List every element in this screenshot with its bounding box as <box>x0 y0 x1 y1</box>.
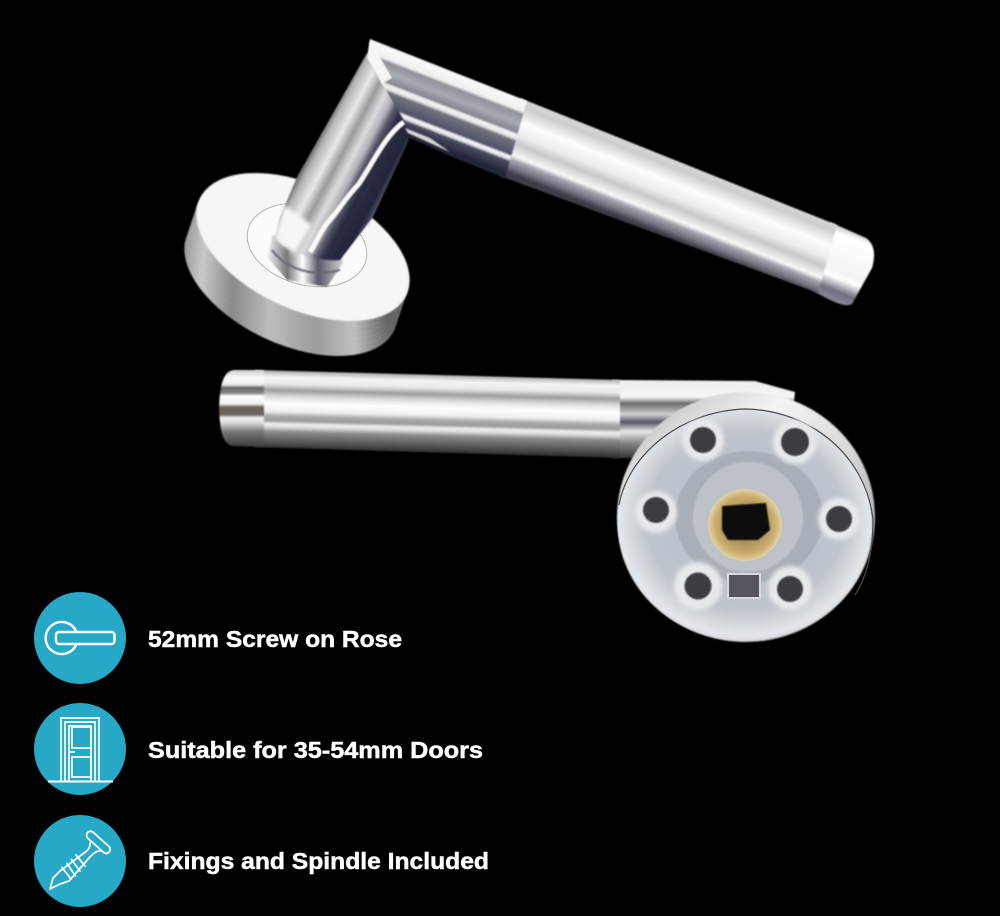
end cap <box>219 370 264 447</box>
neck <box>275 53 420 260</box>
satin bar <box>255 370 620 458</box>
feature: fixings <box>34 815 489 907</box>
lever chrome section <box>368 39 527 178</box>
centre disc <box>675 451 823 583</box>
label: Fixings and Spindle Included <box>148 848 489 874</box>
rose rim <box>617 392 875 642</box>
brass spindle bush <box>708 489 782 561</box>
icon: door handle <box>34 592 126 684</box>
small clip <box>728 574 760 598</box>
hole surrounds <box>635 419 860 610</box>
photo: upper door handle on rose <box>161 39 874 386</box>
hole centres <box>643 427 852 602</box>
rose back plate <box>618 409 872 641</box>
label: Suitable for 35-54mm Doors <box>148 737 483 763</box>
inner ring <box>693 462 803 572</box>
square spindle hole <box>722 503 770 540</box>
corner highlight <box>367 40 392 84</box>
screw holes <box>635 419 860 610</box>
end cap <box>812 222 874 305</box>
icon: screw <box>34 815 126 907</box>
rose face <box>173 143 433 351</box>
rose inner ring <box>238 191 376 299</box>
neck lower bright band <box>275 205 312 254</box>
photo: lower door handle showing rose back <box>219 370 875 642</box>
collar groove <box>272 250 340 273</box>
icon: door <box>34 703 126 795</box>
feature: suitable doors <box>34 703 483 795</box>
collar <box>267 235 343 287</box>
label: 52mm Screw on Rose <box>148 626 402 652</box>
neck highlight curve <box>310 122 404 252</box>
feature: 52mm screw on rose <box>34 592 402 684</box>
neck <box>612 380 795 458</box>
lever lip <box>405 128 450 152</box>
plate edge line <box>619 409 873 595</box>
satin bar <box>500 98 837 293</box>
rose side wall <box>161 148 431 386</box>
